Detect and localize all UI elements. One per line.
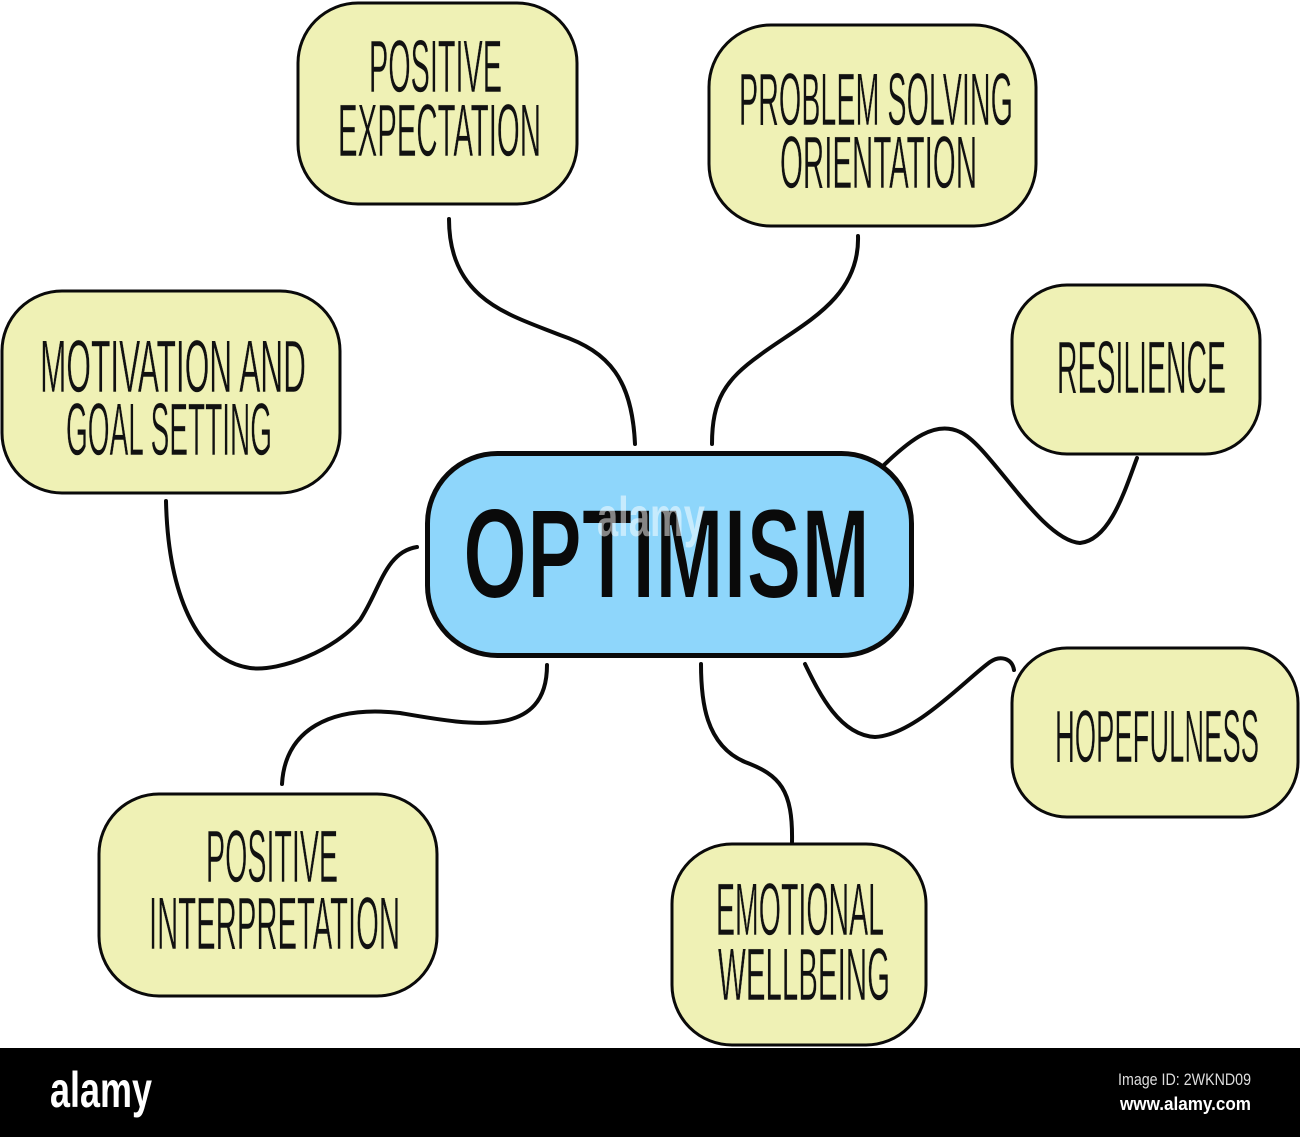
mind map of optimism: INTERPRETATION: [149, 882, 400, 965]
mind map of optimism: EXPECTATION: [338, 89, 541, 172]
node: resilience: [1012, 285, 1260, 454]
node: problem solving orientation: [709, 25, 1036, 226]
node: positive interpretation: POSITIVE: [206, 815, 338, 898]
footer bar: [0, 1048, 1300, 1137]
node: motivation and goal setting: GOAL SETTING: [66, 388, 272, 471]
central node: optimism: [428, 454, 912, 656]
connector: emotional wellbeing: [701, 664, 792, 842]
connector: positive interpretation: [282, 665, 547, 784]
node: motivation and goal setting: [2, 291, 340, 493]
node: positive expectation: POSITIVE: [369, 25, 502, 108]
watermark: alamy: [597, 485, 705, 548]
connector: problem solving orientation: [712, 236, 858, 444]
mind map of optimism: MOTIVATION AND: [40, 325, 306, 408]
node: hopefulness: [1012, 648, 1298, 817]
mind map of optimism: EMOTIONAL: [716, 868, 884, 951]
connector: resilience: [884, 428, 1137, 543]
connector: positive expectation: [449, 219, 635, 444]
node: problem solving orientation: ORIENTATION: [780, 121, 977, 204]
node: positive interpretation: [99, 794, 437, 996]
node: emotional wellbeing: [672, 844, 926, 1045]
image id: Image ID: 2WKND09: [1118, 1070, 1251, 1089]
connector: hopefulness: [805, 658, 1014, 737]
central node: optimism: OPTIMISM: [463, 483, 870, 626]
footer logo: alamy: [50, 1062, 152, 1118]
node: positive expectation: [298, 3, 577, 204]
connector: motivation and goal setting: [166, 501, 417, 668]
mind map of optimism: WELLBEING: [718, 933, 890, 1016]
website: www.alamy.com: [1119, 1094, 1251, 1114]
